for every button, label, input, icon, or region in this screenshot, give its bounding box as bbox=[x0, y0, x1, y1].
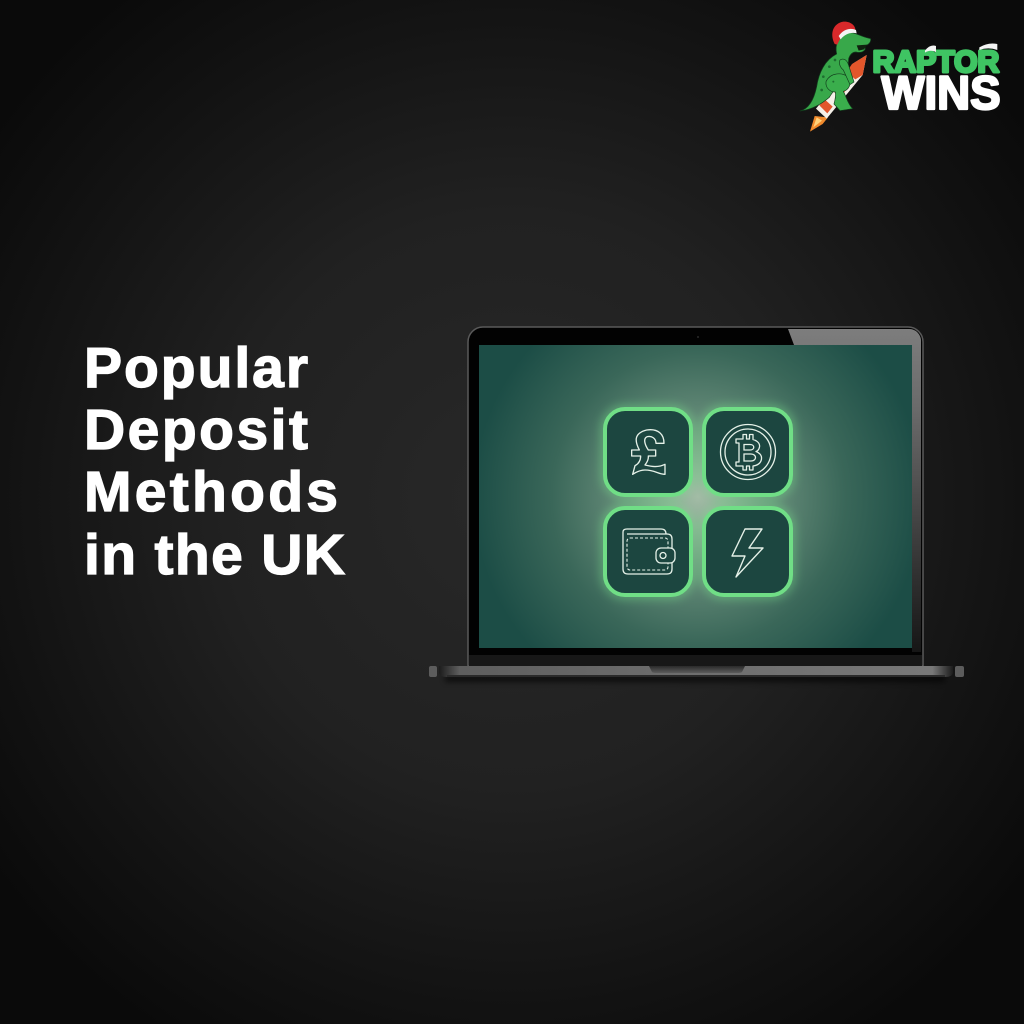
logo text: RAPTOR bbox=[873, 45, 999, 79]
title: in the UK bbox=[84, 523, 345, 587]
logo text: WINS bbox=[881, 67, 1001, 120]
laptop lid bbox=[468, 327, 923, 666]
laptop base bbox=[439, 666, 953, 677]
logo rocket bbox=[810, 55, 867, 132]
icon tile: bitcoin bbox=[704, 409, 791, 495]
logo snow bbox=[925, 43, 997, 53]
screen bbox=[479, 345, 912, 648]
logo santa hat bbox=[832, 22, 857, 45]
title: Deposit bbox=[84, 398, 308, 462]
title: Popular bbox=[84, 336, 308, 400]
camera bbox=[697, 336, 699, 338]
trackpad notch bbox=[649, 666, 745, 673]
icon tile glow bbox=[605, 409, 791, 595]
logo dinosaur bbox=[800, 33, 871, 111]
title bbox=[84, 336, 345, 587]
laptop shadow bbox=[445, 675, 945, 682]
logo text bbox=[873, 45, 1001, 120]
lid reflection bbox=[788, 329, 921, 652]
chin bbox=[469, 655, 922, 666]
icon tile: lightning bbox=[704, 508, 791, 595]
title: Methods bbox=[84, 460, 338, 524]
logo bbox=[800, 22, 1001, 132]
icon tile: pound bbox=[605, 409, 691, 495]
icon tile: wallet bbox=[605, 508, 691, 595]
base end caps bbox=[429, 666, 964, 677]
laptop bbox=[429, 327, 964, 682]
